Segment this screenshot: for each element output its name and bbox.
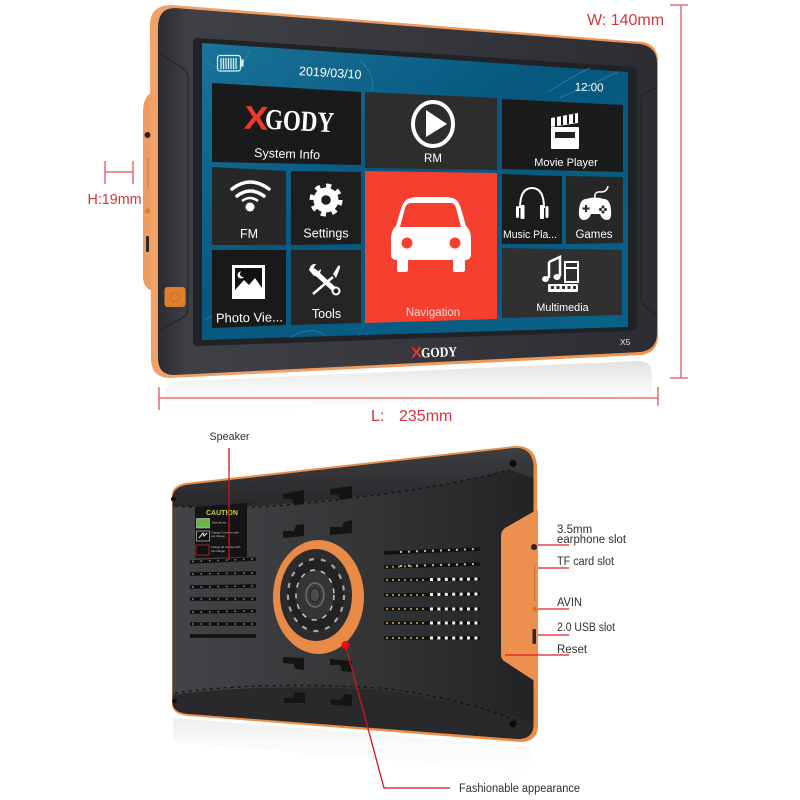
- callout: 2.0 USB slot: 2.0 USB slot: [557, 622, 616, 634]
- caution label: Charge 20 minutes with: [211, 545, 241, 549]
- callout: Speaker: Speaker: [210, 431, 250, 443]
- stitching: [175, 470, 520, 722]
- tile: RM: RM: [424, 153, 442, 165]
- callout: Fashionable appearance: Fashionable appearance: [459, 783, 580, 795]
- tile: FM: FM: [240, 227, 258, 241]
- screen background: [202, 43, 628, 340]
- tile: Movie Player: [502, 99, 623, 172]
- XGODY logo: [243, 99, 335, 140]
- mounting slots: [283, 486, 352, 706]
- orange outer shell: [150, 5, 658, 378]
- screws: [171, 460, 516, 728]
- tile: Settings: [291, 171, 361, 245]
- caution label: Charge 5 minutes with: [211, 530, 239, 534]
- tile: Multimedia: Multimedia: [536, 302, 589, 314]
- battery icon: [218, 56, 243, 71]
- dimension: length 235mm: [159, 387, 658, 425]
- tile: Games: Games: [575, 229, 613, 241]
- tile: Music Player: Music Pla...: [503, 229, 557, 241]
- tile: Settings: Settings: [303, 226, 349, 240]
- tile: FM: [212, 167, 286, 245]
- dark back cover: [172, 448, 534, 739]
- callout: AVIN: [538, 597, 582, 609]
- caution label: car charger: [211, 549, 225, 553]
- callout: 3.5mm earphone slot: [538, 524, 627, 546]
- front XGODY logo: GODY: [421, 345, 457, 361]
- caution label: Normal use: [212, 520, 227, 524]
- XGODY logo: GODY: [264, 104, 335, 139]
- front XGODY logo: [411, 343, 457, 362]
- callout: Reset: Reset: [557, 644, 588, 656]
- side port bulge: [143, 92, 153, 291]
- callout: AVIN: AVIN: [557, 597, 582, 609]
- power button: [164, 287, 186, 307]
- tile: Navigation: [365, 171, 497, 323]
- bezel corner panels: [158, 53, 657, 331]
- screen wallpaper swirls: [205, 50, 618, 338]
- tile: Music Player: [502, 174, 562, 244]
- dimension: height 19mm: H:19mm: [88, 192, 142, 208]
- tile: Navigation: Navigation: [406, 307, 460, 319]
- tile: Games: [566, 176, 623, 244]
- tile: Photo Viewer: [212, 250, 286, 328]
- back device: [171, 446, 538, 772]
- front device: navigator: [143, 5, 658, 415]
- tile: RM: [365, 92, 497, 170]
- dimension: width 140mm: [587, 5, 688, 378]
- right speaker grille: [384, 549, 480, 638]
- top cover band: [172, 448, 534, 507]
- orange port panel: [501, 510, 538, 684]
- left speaker grille: [190, 559, 256, 636]
- callout: Speaker: [210, 431, 250, 560]
- dimension: width 140mm: W: 140mm: [587, 12, 664, 29]
- caution label: car charger: [211, 534, 225, 538]
- dimension: length 235mm: 235mm: [399, 408, 452, 425]
- callout: 2.0 USB slot: [538, 622, 616, 635]
- callout: TF card slot: TF card slot: [557, 556, 615, 568]
- front XGODY logo: X: [411, 344, 422, 362]
- tile: Movie Player: Movie Player: [534, 157, 598, 169]
- front device reflection: [165, 361, 652, 415]
- dimension: height 19mm: [88, 161, 142, 208]
- callout: 3.5mm earphone slot: 3.5mm: [557, 524, 592, 536]
- dark front bezel: [158, 8, 657, 375]
- tile: Tools: [291, 250, 361, 325]
- bottom cover band: [172, 687, 534, 739]
- dimension: length 235mm: L:: [371, 408, 384, 425]
- caution label: [195, 503, 247, 558]
- callout: 3.5mm earphone slot: earphone slot: [557, 534, 627, 546]
- clock: 12:00: [575, 82, 604, 94]
- tile: Photo Viewer: Photo Vie...: [216, 309, 283, 326]
- back device reflection: [173, 718, 530, 772]
- tile: System Info: [212, 83, 361, 165]
- screen frame: [193, 38, 637, 346]
- rear speaker with orange ring: [273, 540, 364, 654]
- callout: Fashionable appearance: [342, 641, 580, 795]
- model label X5: X5: [620, 337, 631, 347]
- tile: Multimedia: [502, 248, 622, 318]
- icon: car: [391, 197, 471, 272]
- caution label: CAUTION: [206, 510, 238, 517]
- date: 2019/03/10: [299, 64, 362, 82]
- tile: System Info: System Info: [254, 146, 320, 162]
- XGODY logo: X: [243, 99, 269, 137]
- orange back shell: [172, 446, 538, 742]
- tile: Tools: Tools: [312, 307, 341, 321]
- callout: Reset: [505, 644, 588, 656]
